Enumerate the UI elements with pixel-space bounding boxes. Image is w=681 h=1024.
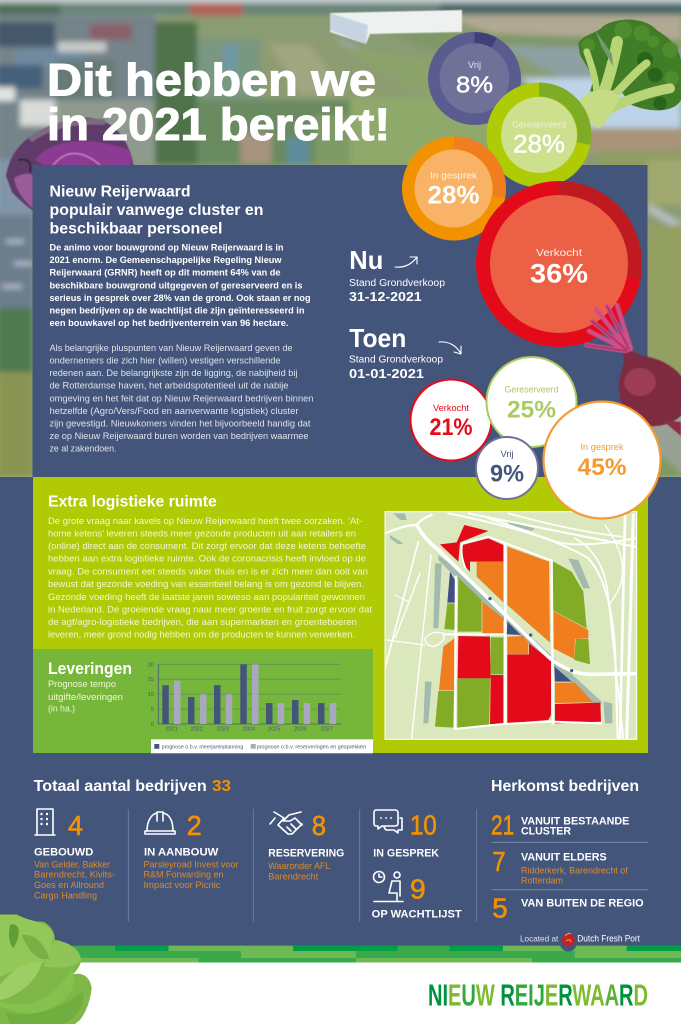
origin: elders: Ridderkerk, Barendrecht of [521,865,628,875]
donut: verkocht 36%: 36% [530,259,588,289]
stat: gebouwd: Cargo Handling [34,890,97,900]
heading: toen: Toen [349,323,406,353]
circle: verkocht 21%: Verkocht [433,403,469,414]
title: Dit hebben we [47,54,376,106]
text block: intro regular: redenen aan. De belangrijkste zijn de ligging, de nabijheid bij [50,367,298,378]
circle: verkocht 21% [410,380,492,460]
heading: nu: Nu [349,245,383,275]
text block: leveringen: (in ha.) [48,704,75,715]
origin: bestaande cluster: 21 [491,809,514,840]
located at dutch fresh port [520,933,640,952]
chart legend: prognose o.b.v. reserveringen en gesprekken [257,744,366,750]
stat: reservering [268,810,344,882]
stat: gebouwd [34,809,115,900]
bar chart: 5 [151,707,154,713]
stat: in gesprek: 10 [410,809,437,840]
heading: intro [50,184,264,238]
bar chart: 15 [148,677,154,683]
heading: nu: Stand Grondverkoop [349,278,446,289]
stat: gebouwd: GEBOUWD [34,847,93,859]
stat: in aanbouw [144,810,238,890]
panel: leveringen [33,649,373,753]
circle: gereserveerd 25%: 25% [507,397,556,424]
bar chart: 2021 [166,727,178,733]
text block: logistiek: hebben aan extra logistieke ruimte. Ook de coronacrisis heeft invloed op de [48,554,366,565]
heading: totaal aantal bedrijven: 33 [212,778,231,795]
circle: verkocht 21%: 21% [430,414,472,441]
text block: intro bold: een bouwkavel op het bedrijventerrein van 96 hectare. [50,317,288,328]
origin: buiten de regio: VAN BUITEN DE REGIO [521,898,644,910]
stat: in aanbouw: Impact voor Picnic [144,880,221,890]
text block: intro regular [50,342,314,454]
text block: leveringen [48,679,123,715]
text block: intro regular: omgeving en het feit dat op Nieuw Reijerwaard bedrijven binnen [50,392,314,403]
heading: intro: populair vanwege cluster en [50,202,264,219]
stat: op wachtlijst [372,872,462,921]
donut: vrij 8%: 8% [456,71,493,97]
text block: logistiek [48,516,372,641]
located at dutch fresh port: Located at [520,934,559,944]
donut: verkocht 36%: Verkocht [536,248,582,259]
origin: bestaande cluster [491,809,629,840]
origin: elders: 7 [492,846,506,877]
chart legend [151,739,373,753]
stat: in aanbouw: 2 [187,810,202,841]
text block: intro regular: hetzelfde (Agro/Vers/Food en aanverwante logistiek) cluster [50,405,298,416]
bar chart: 20 [148,662,154,668]
bar chart: 2027 [321,727,333,733]
text block: intro bold: Reijerwaard (GRNR) heeft op dit moment 64% van de [50,267,280,278]
panel: intro [32,165,648,480]
arrow: nu [395,257,417,267]
text block: logistiek: leveren, meer grond nodig hebben om de producten te kunnen verwerken. [48,630,355,641]
stat: gebouwd: Van Gelder, Bakker [34,859,110,869]
text block: intro bold: 2021 enorm. De Gemeenschappelijke Regeling Nieuw [50,254,282,265]
text block: intro bold [50,242,311,328]
origin: bestaande cluster: CLUSTER [521,825,571,837]
donut: verkocht 36% [476,181,642,347]
icon: beetroot leaves [586,305,631,351]
heading: totaal aantal bedrijven: Totaal aantal bedrijven [34,778,207,795]
text block: logistiek: bewust dat gezonde voeding van essentieel belang is om gezond te blijven. [48,579,364,590]
origin: elders: VANUIT ELDERS [521,852,607,864]
circle: in gesprek 45% [544,402,660,518]
stat: reservering: 8 [312,810,326,841]
text block: leveringen: Prognose tempo [48,679,116,690]
circle: vrij 9%: 9% [490,461,524,488]
stat: reservering: RESERVERING [268,848,344,860]
heading: toen [349,323,461,381]
text block: logistiek: Gezonde voeding heeft de laatste jaren sowieso aan populariteit gewonnen [48,592,365,603]
circle: in gesprek 45%: 45% [578,454,626,481]
stat: op wachtlijst: OP WACHTLIJST [372,909,462,921]
icon: broccoli [578,20,681,128]
text block: intro bold: negen bedrijven op de wachtlijst die zijn geïnteresseerd in [50,304,305,316]
bar chart: 2022 [191,727,203,733]
logo: nieuw reijerwaard: NIEUW REIJERWAARD [428,978,648,1013]
heading: leveringen: Leveringen [48,660,132,678]
bar chart: 10 [148,692,154,698]
title [47,54,390,150]
stat: in aanbouw: R&M Forwarding en [144,870,224,880]
heading: intro: Nieuw Reijerwaard [50,184,190,201]
icon: beetroot body [619,351,681,436]
stat: in gesprek [373,809,439,860]
icon: building [35,809,55,835]
aerial photo background [0,0,681,480]
text block: intro bold: serieus in gesprek over 28% van de grond. Ook staan er nog [50,292,311,303]
heading: herkomst bedrijven: Herkomst bedrijven [491,778,639,795]
text block: intro bold: De animo voor bouwgrond op Nieuw Reijerwaard is in [50,242,284,252]
stat: reservering: Waaronder AFL [268,861,330,871]
text block: logistiek: de agf/agro-logistieke bedrijven, die aan supermarkten en groenteboeren [48,617,357,628]
text block: intro regular: de Rotterdamse haven, het arbeidspotentieel uit de nabije [50,380,288,391]
origin: elders: Rotterdam [521,876,563,886]
origin: buiten de regio [492,893,644,924]
text block: logistiek: in Nederland. De groeiende vraag naar meer groente en fruit zorgt ervoor dat [48,604,372,615]
circle: vrij 9%: Vrij [500,449,514,459]
map [385,512,637,739]
located at dutch fresh port: Dutch Fresh Port [577,934,640,944]
title: in 2021 bereikt! [47,99,390,150]
donut: gereserveerd 28%: Gereserveerd [512,119,566,130]
icon: waiting person [374,872,403,902]
donut: in gesprek 28% [402,136,506,240]
chart legend: prognose o.b.v. meerjarenplanning [162,744,244,750]
icon: dutch fresh port logo [560,933,577,952]
text block: leveringen: uitgifte/leveringen [48,692,123,703]
donut: vrij 8% [428,32,521,125]
icon: speech bubbles [374,810,402,833]
bar chart [148,662,341,733]
origin: buiten de regio: 5 [492,893,508,924]
heading: toen: Stand Grondverkoop [349,355,444,366]
icon: lettuce [0,914,92,1024]
text block: logistiek: (online) direct aan de consument. Dit zorgt ervoor dat deze ketens behoefte [48,541,366,552]
bar chart: 2025 [268,727,280,733]
heading: nu: 31-12-2021 [349,289,422,304]
stat: in aanbouw: IN AANBOUW [144,847,219,859]
circle: in gesprek 45%: In gesprek [580,442,624,453]
stat: reservering: Barendrecht [268,872,319,882]
green stripes [0,946,681,962]
donut: in gesprek 28%: In gesprek [430,170,477,181]
stat: gebouwd: Goes en Allround [34,880,104,890]
donut: vrij 8%: Vrij [468,60,481,71]
text block: intro regular: ze al zakendoen. [50,443,116,454]
stat: op wachtlijst: 9 [410,873,426,904]
chart: toen circles [410,357,660,518]
circle: gereserveerd 25%: Gereserveerd [504,385,558,396]
origin: bestaande cluster: VANUIT BESTAANDE [521,815,629,827]
bar chart: 2023 [217,727,229,733]
bar chart: 2024 [243,727,255,733]
circle: gereserveerd 25% [486,357,576,447]
icon: red cabbage [6,118,134,222]
origin: elders [492,846,628,886]
stat: in aanbouw: Parsleyroad Invest voor [144,859,238,869]
text block: intro regular: Als belangrijke pluspunten van Nieuw Reijerwaard geven de [50,342,292,353]
donut: gereserveerd 28% [486,82,592,188]
bottom navy background [0,477,681,946]
photo: white distribution building [330,10,462,44]
stat: gebouwd: 4 [68,810,83,841]
heading: extra logistieke ruimte: Extra logistieke ruimte [48,494,217,511]
donut: gereserveerd 28%: 28% [513,130,565,158]
text block: logistiek: De grote vraag naar kavels op Nieuw Reijerwaard heeft twee oorzaken. ‘At- [48,516,362,527]
heading: toen: 01-01-2021 [349,366,424,381]
arrow: toen [439,342,461,354]
icon: helmet [145,812,175,834]
circle: vrij 9% [476,437,538,499]
heading: nu [349,245,446,304]
text block: logistiek: home ketens’ leveren steeds meer gezonde producten uit aan retailers en [48,529,356,540]
text block: intro regular: ondernemers die zich hier (willen) vestigen verschillende [50,355,280,366]
bar chart: 0 [151,722,154,728]
stat: gebouwd: Barendrecht, Kivits- [34,870,115,880]
text block: intro regular: zijn gevestigd. Nieuwkomers vinden het bijvoorbeeld handig dat [50,417,311,428]
text block: logistiek: vraag. De consument eet steeds vaker thuis en is er zich meer dan ooit van [48,566,368,577]
text block: intro bold: beschikbare bouwgrond uitgegeven of gereserveerd en is [50,279,302,290]
donut: in gesprek 28%: 28% [428,181,480,209]
chart: nu donuts [402,32,642,347]
text block: intro regular: ze op Nieuw Reijerwaard buren worden van bedrijven waarmee [50,430,308,441]
panel: herkomst bedrijven [491,778,648,924]
bar chart: 2026 [294,727,306,733]
stat: in gesprek: IN GESPREK [373,848,439,860]
icon: handshake [270,812,302,834]
heading: intro: beschikbaar personeel [50,221,222,238]
